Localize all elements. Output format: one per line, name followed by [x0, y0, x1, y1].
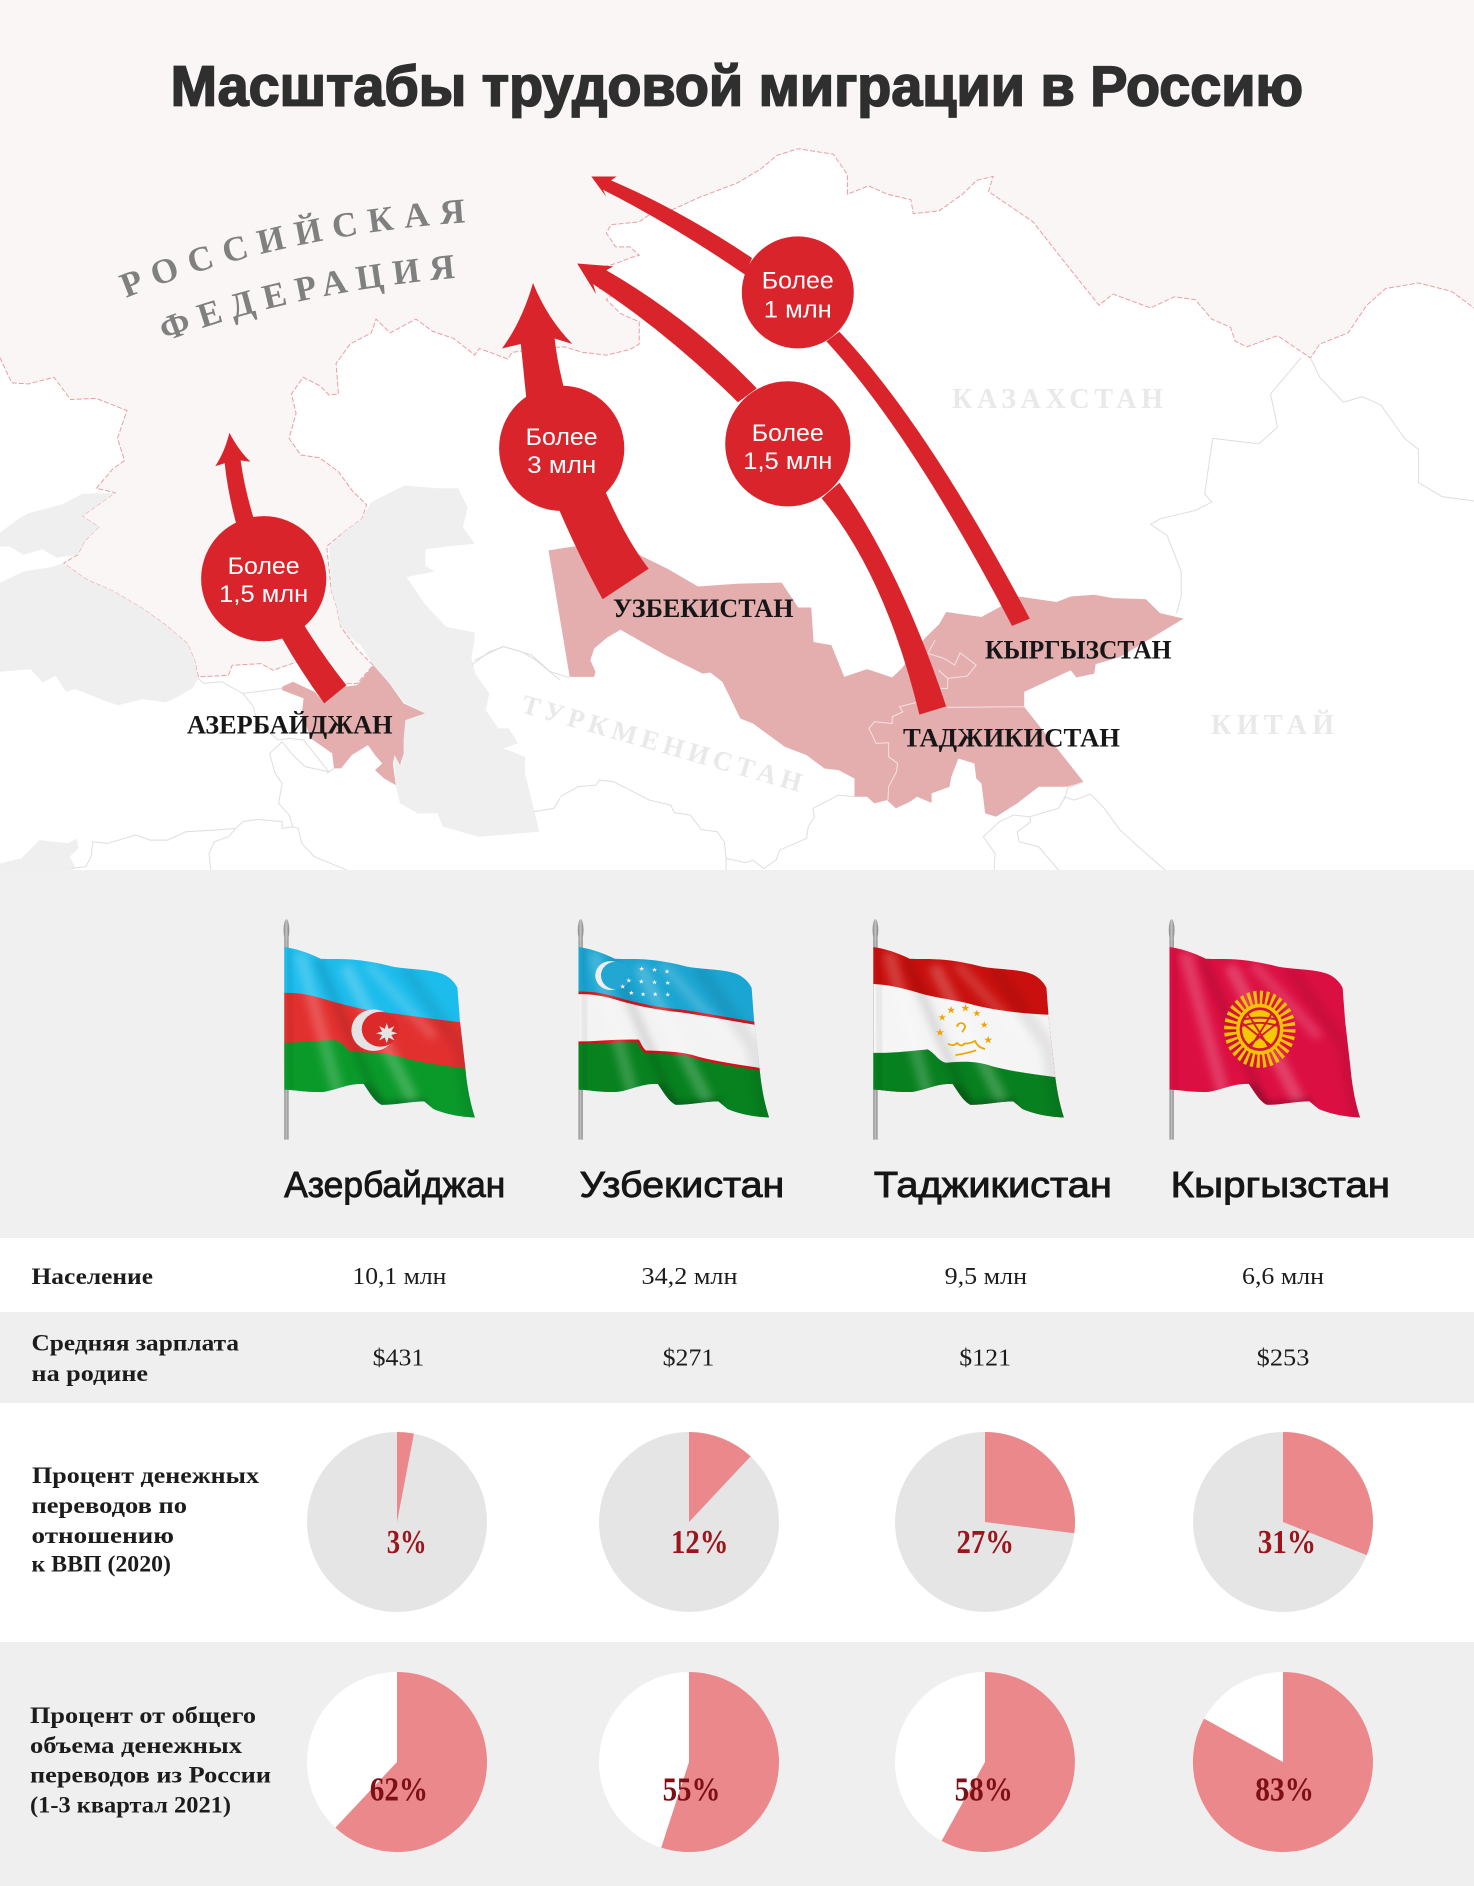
row label: share of GDP: отношению — [32, 1523, 174, 1548]
bubble: Kyrgyzstan migrants — [742, 236, 854, 348]
label: Kazakhstan: КАЗАХСТАН — [952, 384, 1163, 415]
panel: flags and country names — [0, 870, 1474, 1238]
row label: share of GDP: переводов по — [32, 1493, 187, 1518]
pie chart: Uzbekistan 12% — [599, 1432, 779, 1612]
label: Azerbaijan: АЗЕРБАЙДЖАН — [187, 711, 392, 740]
bubble: Azerbaijan migrants: 1,5 млн — [219, 581, 308, 608]
arrow: Kyrgyzstan — [591, 176, 1030, 626]
row: average salary: $271 — [663, 1346, 714, 1372]
bubble: Uzbekistan migrants: 3 млн — [527, 452, 596, 479]
pie chart: Azerbaijan 62% — [307, 1672, 487, 1852]
bubble: Uzbekistan migrants: Более — [526, 424, 598, 451]
row: remittances as share of GDP — [0, 1403, 1474, 1642]
map: remaining country borders — [475, 358, 1474, 678]
label: Russian Federation — [118, 200, 465, 338]
map: southwest details — [0, 640, 560, 872]
pie chart: Azerbaijan 62%: 62% — [370, 1771, 428, 1808]
arrow: Azerbaijan — [215, 433, 346, 704]
pie chart: Azerbaijan 3%: 3% — [387, 1524, 427, 1561]
pie chart: Azerbaijan 3% — [307, 1432, 487, 1612]
row label: share from Russia: (1-3 квартал 2021) — [30, 1793, 231, 1818]
label: Russian Federation: РОССИЙСКАЯ — [118, 200, 465, 298]
row: share of remittances from Russia — [0, 1642, 1474, 1886]
heading: Tajikistan: Таджикистан — [874, 1164, 1112, 1205]
bubble: Azerbaijan migrants — [201, 516, 326, 641]
title: Масштабы трудовой миграции в Россию — [171, 54, 1303, 118]
map: southwest country borders — [71, 647, 560, 870]
row: population: Население — [32, 1264, 153, 1289]
bubble: Uzbekistan migrants — [499, 386, 624, 511]
row: average salary — [0, 1312, 1474, 1403]
pie chart: Uzbekistan 55% — [599, 1672, 779, 1852]
label: Tajikistan: ТАДЖИКИСТАН — [903, 723, 1120, 752]
pie chart: Kyrgyzstan 83% — [1193, 1672, 1373, 1852]
label: Kyrgyzstan: КЫРГЫЗСТАН — [985, 636, 1172, 665]
map: Uzbekistan, Tajikistan and Kyrgyzstan highlighted — [549, 547, 1184, 817]
map: Russia territory — [0, 0, 1474, 684]
icon: flag of Azerbaijan — [281, 919, 478, 1140]
icon: flag of Kyrgyzstan — [1167, 919, 1363, 1140]
map: southern country borders — [560, 780, 1167, 872]
pie chart: Tajikistan 58% — [895, 1672, 1075, 1852]
pie chart: Kyrgyzstan 31%: 31% — [1258, 1524, 1316, 1561]
row: population: 6,6 млн — [1242, 1264, 1324, 1290]
map: Caspian Sea north — [329, 485, 475, 644]
label: Russian Federation: ФЕДЕРАЦИЯ — [161, 255, 455, 338]
pie chart: Tajikistan 27%: 27% — [956, 1524, 1014, 1561]
bubble: Kyrgyzstan migrants: 1 млн — [764, 296, 832, 323]
row: average salary: на родине — [32, 1361, 148, 1386]
bubble: Kyrgyzstan migrants: Более — [762, 268, 834, 295]
arrow: Tajikistan — [577, 264, 946, 715]
row: population: 9,5 млн — [945, 1264, 1027, 1290]
icon: flag of Tajikistan — [870, 919, 1067, 1140]
pie chart: Uzbekistan 12%: 12% — [671, 1524, 728, 1561]
heading: Azerbaijan: Азербайджан — [284, 1164, 505, 1205]
bubble: Tajikistan migrants — [725, 381, 850, 506]
bubble: Azerbaijan migrants: Более — [228, 553, 300, 580]
map: sea, bottom left — [0, 838, 79, 872]
row label: share of GDP: к ВВП (2020) — [32, 1552, 171, 1577]
label: Turkmenistan: ТУРКМЕНИСТАН — [518, 689, 805, 798]
row label: share from Russia: переводов из России — [30, 1763, 271, 1788]
row label: share from Russia: Процент от общего — [30, 1703, 256, 1728]
bubble: Tajikistan migrants: Более — [752, 420, 824, 447]
row: average salary: $121 — [959, 1346, 1011, 1372]
pie chart: Kyrgyzstan 83%: 83% — [1255, 1771, 1314, 1808]
map: Black Sea — [0, 563, 198, 705]
row: population — [0, 1238, 1474, 1312]
row: average salary: Средняя зарплата — [32, 1330, 240, 1355]
pie chart: Tajikistan 58%: 58% — [955, 1771, 1013, 1808]
row label: share of GDP — [32, 1463, 260, 1577]
bubble: Tajikistan migrants: 1,5 млн — [743, 448, 832, 475]
map: internal white borders — [869, 640, 1024, 800]
pie chart: Kyrgyzstan 31% — [1193, 1432, 1373, 1612]
row: population: 10,1 млн — [352, 1264, 447, 1290]
arrow: Uzbekistan — [502, 283, 649, 599]
row: average salary: $431 — [373, 1346, 424, 1372]
row label: share from Russia — [30, 1703, 271, 1818]
heading: Uzbekistan: Узбекистан — [580, 1164, 784, 1205]
row: population: 34,2 млн — [642, 1264, 738, 1290]
label: Uzbekistan: УЗБЕКИСТАН — [613, 594, 794, 623]
pie chart: Uzbekistan 55%: 55% — [663, 1771, 720, 1808]
map: Sea of Azov — [0, 493, 115, 558]
label: China: КИТАЙ — [1211, 710, 1334, 741]
panel: map — [0, 0, 1474, 870]
map: Caspian Sea south — [357, 640, 539, 837]
map: central Asia details — [560, 640, 1167, 872]
icon: flag of Uzbekistan — [576, 919, 772, 1140]
row label: share of GDP: Процент денежных — [32, 1463, 260, 1488]
row label: share from Russia: объема денежных — [30, 1733, 243, 1758]
map: Azerbaijan highlighted — [282, 665, 425, 785]
pie chart: Tajikistan 27% — [895, 1432, 1075, 1612]
row: average salary: $253 — [1257, 1346, 1309, 1372]
heading: Kyrgyzstan: Кыргызстан — [1171, 1164, 1390, 1205]
